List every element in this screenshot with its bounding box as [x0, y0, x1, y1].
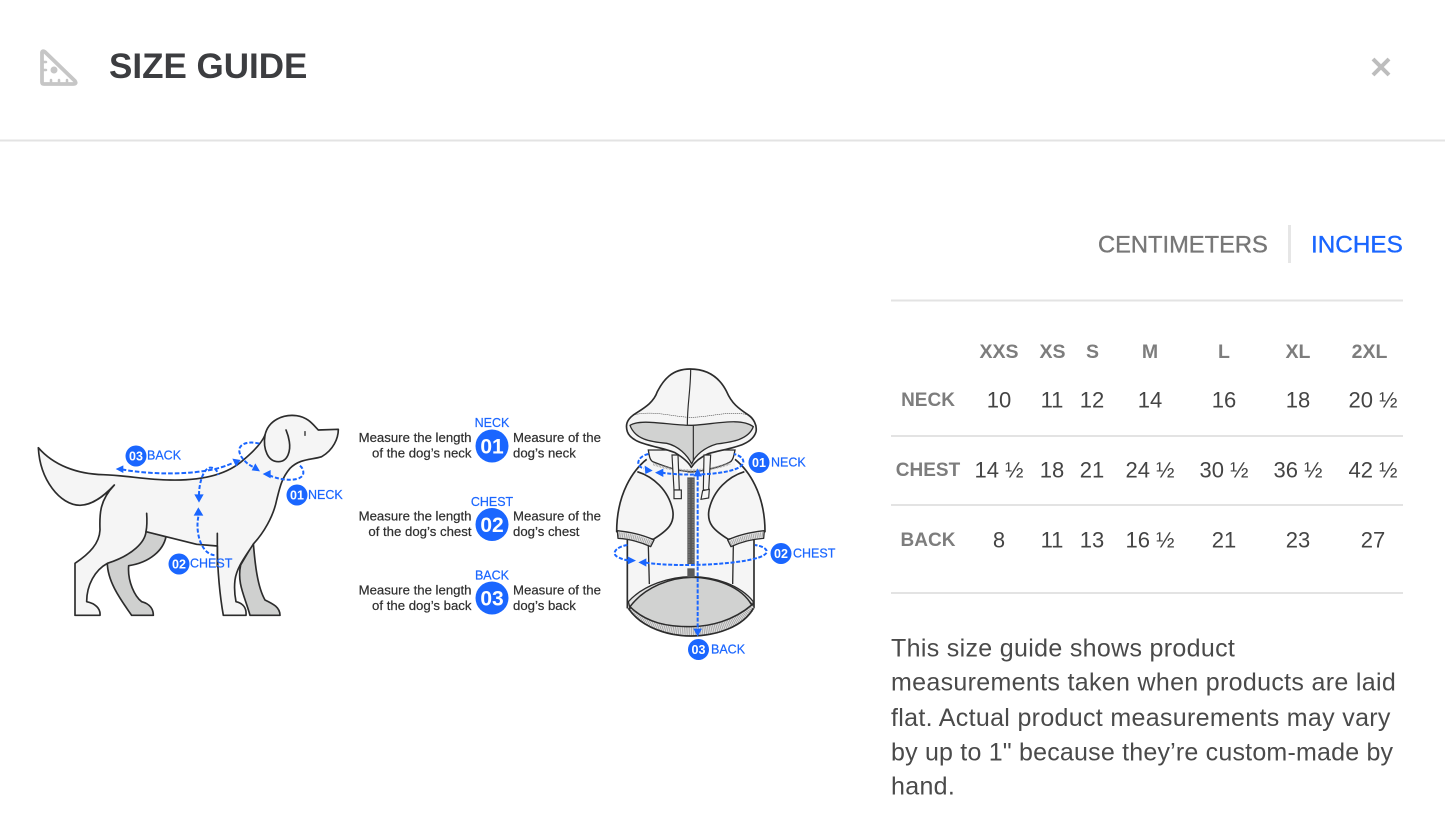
legend: neck: of the dog’s neck [372, 446, 472, 460]
legend: chest: CHEST [471, 495, 514, 509]
dog label: chest [168, 554, 233, 574]
row: chest: 18 [1040, 458, 1064, 482]
hoodie label: neck: NECK [771, 456, 806, 470]
row: neck: 14 [1138, 388, 1162, 412]
legend: neck: Measure of the [513, 430, 601, 445]
row: neck: 11 [1041, 388, 1063, 412]
hood inner [630, 422, 753, 464]
arrow: neck measure [638, 454, 743, 477]
upper hem rim [628, 577, 753, 608]
size note paragraph [891, 634, 1396, 800]
legend: chest: Measure the length [359, 508, 472, 524]
row: neck: NECK [901, 390, 955, 411]
illustration: hoodie [615, 369, 767, 637]
row: back: 8 [993, 528, 1005, 552]
left sleeve [617, 459, 673, 547]
row: chest: 24 ½ [1126, 458, 1174, 482]
unit toggle [1098, 225, 1403, 263]
legend: back [359, 568, 601, 614]
legend: back: dog’s back [513, 598, 576, 613]
hem opening [630, 577, 752, 627]
legend: back: BACK [475, 568, 510, 582]
table header row: S [1086, 341, 1099, 363]
hoodie label: chest: CHEST [793, 546, 836, 560]
arrow: chest measure [615, 545, 767, 567]
arrow: back measure [693, 468, 702, 637]
ear [264, 430, 290, 462]
hem rib [628, 603, 753, 636]
dog label: chest: 02 [172, 558, 186, 572]
legend: neck [359, 416, 601, 462]
hoodie label: back: 03 [692, 643, 705, 657]
dog label: neck: 01 [290, 488, 304, 502]
arrow: back measure [116, 459, 241, 473]
table header row: XXS [979, 341, 1019, 363]
body [38, 415, 338, 615]
dog label: back: 03 [129, 450, 143, 464]
size note paragraph: measurements taken when products are laid [891, 668, 1396, 696]
legend: back: of the dog’s back [372, 598, 472, 613]
legend: neck: dog’s neck [513, 446, 576, 460]
hoodie label: chest [770, 543, 836, 564]
row: back [901, 528, 1385, 552]
row: neck: 16 [1212, 388, 1236, 412]
hoodie label: back: BACK [711, 642, 746, 656]
row: back: 13 [1080, 528, 1104, 552]
row: back: 23 [1286, 528, 1310, 552]
dog label: back: BACK [147, 448, 182, 462]
illustration: dog [38, 415, 338, 615]
table header row: L [1218, 341, 1230, 363]
arrow: neck measure [239, 443, 303, 480]
unit toggle: CENTIMETERS [1098, 232, 1268, 258]
legend: back: Measure the length [359, 582, 472, 598]
table header row [979, 341, 1387, 363]
arrow: chest measure [194, 468, 218, 555]
dog label: chest: CHEST [190, 556, 233, 570]
collar [648, 450, 735, 472]
icon: ruler triangle [42, 51, 76, 84]
row: neck: 10 [987, 388, 1011, 412]
row: back: 27 [1361, 528, 1385, 552]
hoodie body fill [627, 457, 754, 608]
row: back: BACK [901, 530, 956, 551]
size note paragraph: hand. [891, 772, 955, 800]
row: chest: CHEST [896, 460, 961, 481]
size note paragraph: by up to 1" because they’re custom-made by [891, 738, 1394, 766]
size note paragraph: flat. Actual product measurements may vary [891, 704, 1391, 732]
zipper [687, 468, 695, 577]
legend: chest: dog’s chest [513, 524, 580, 539]
size note paragraph: This size guide shows product [891, 634, 1235, 662]
legend: chest [359, 495, 601, 541]
row: neck: 20 ½ [1349, 388, 1397, 412]
table header row: XL [1286, 341, 1311, 363]
row: chest: 14 ½ [975, 458, 1023, 482]
row: back: 11 [1041, 528, 1063, 552]
drawstrings [672, 455, 711, 499]
row: neck: 12 [1080, 388, 1104, 412]
body sides [627, 540, 754, 608]
row: chest: 21 [1080, 458, 1104, 482]
dog label: neck [286, 484, 343, 506]
legend: chest: of the dog’s chest [368, 524, 472, 539]
right sleeve [709, 459, 765, 547]
row: chest: 42 ½ [1349, 458, 1397, 482]
row: back: 16 ½ [1126, 528, 1174, 552]
row: chest: 36 ½ [1274, 458, 1322, 482]
hoodie label: neck: 01 [752, 456, 766, 470]
far legs [107, 531, 280, 615]
row: back: 21 [1212, 528, 1236, 552]
table header row: M [1142, 341, 1158, 363]
hoodie label: back [688, 639, 746, 660]
hood [626, 369, 756, 467]
row: neck: 18 [1286, 388, 1310, 412]
legend: back: 03 [480, 588, 504, 610]
row: neck [901, 388, 1397, 412]
size table [891, 300, 1403, 593]
dog label: neck: NECK [308, 488, 343, 502]
hoodie label: neck [748, 452, 806, 473]
title: SIZE GUIDE [109, 47, 307, 86]
row: chest: 30 ½ [1200, 458, 1248, 482]
legend: neck: NECK [475, 416, 510, 430]
row: chest [896, 458, 1397, 482]
table header row: 2XL [1352, 341, 1387, 363]
legend: neck: Measure the length [359, 430, 472, 445]
header [42, 47, 1389, 86]
legend: chest: 02 [480, 514, 504, 537]
icon: close [1373, 59, 1389, 75]
dog label: back [126, 446, 182, 466]
legend: chest: Measure of the [513, 508, 601, 524]
legend: neck: 01 [480, 436, 504, 458]
hoodie label: chest: 02 [774, 547, 788, 561]
legend: back: Measure of the [513, 582, 601, 598]
unit toggle: INCHES [1311, 232, 1403, 258]
table header row: XS [1039, 341, 1066, 363]
